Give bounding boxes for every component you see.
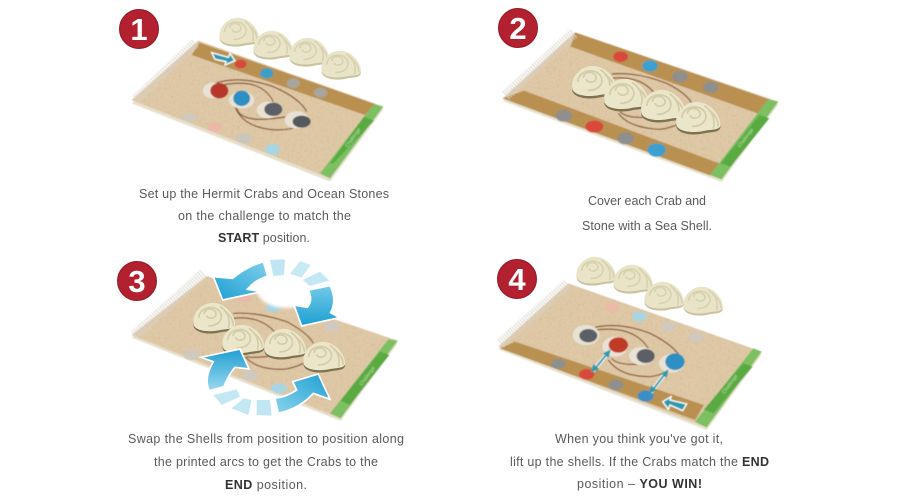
caption 3 [128, 432, 404, 492]
sea shells on board 2 [572, 66, 720, 134]
caption 1 [139, 187, 389, 245]
caption 1: START position. [218, 231, 310, 245]
step 3 badge [118, 262, 156, 300]
caption 4: lift up the shells. If the Crabs match the END [510, 455, 769, 469]
caption 2: Stone with a Sea Shell. [582, 219, 712, 233]
caption 1: Set up the Hermit Crabs and Ocean Stones [139, 187, 389, 201]
panel 4: reveal [498, 257, 769, 491]
step 2 badge [498, 8, 538, 48]
caption 4: When you think you've got it, [555, 432, 723, 446]
board 1 illustration: Challenge [344, 127, 363, 149]
caption 1: on the challenge to match the [178, 209, 351, 223]
step 2 badge: 2 [509, 11, 527, 46]
panel 3: swap [118, 259, 404, 492]
arrow: top fade segments [270, 259, 329, 286]
arrow: bottom left [201, 349, 249, 391]
step 3 badge: 3 [128, 264, 146, 299]
panel 2: cover [498, 8, 778, 233]
caption 3: the printed arcs to get the Crabs to the [154, 455, 378, 469]
board 2 illustration: Challenge [737, 127, 755, 149]
caption 3: Swap the Shells from position to position along [128, 432, 404, 446]
white glow inside top of arrows [257, 272, 317, 308]
board 1 illustration [132, 41, 383, 182]
step 4 badge: 4 [508, 262, 526, 297]
caption 3: END position. [225, 478, 307, 492]
arrow: bottom fade segments [213, 389, 272, 416]
step 4 badge [498, 260, 536, 298]
arrow: bottom right [275, 374, 330, 413]
board 3 illustration [132, 274, 398, 421]
panel 1: set up [120, 10, 389, 245]
board 3 illustration: Challenge [358, 365, 377, 387]
caption 4 [510, 432, 769, 491]
board 4 illustration [498, 283, 762, 430]
sea shells above board 4 [577, 257, 723, 316]
step 1 badge [120, 10, 158, 48]
board 2 illustration [503, 32, 778, 182]
arrow: right [294, 286, 339, 326]
swap arrows [201, 259, 339, 416]
sea shells on board 3 [193, 303, 345, 373]
sea shells above board 1 [220, 18, 361, 80]
board 4 illustration: Challenge [721, 373, 740, 395]
caption 2: Cover each Crab and [588, 194, 706, 208]
caption 2 [582, 194, 712, 233]
arrow: top left [213, 262, 268, 300]
caption 4: position – YOU WIN! [577, 477, 702, 491]
step 1 badge: 1 [130, 12, 148, 47]
